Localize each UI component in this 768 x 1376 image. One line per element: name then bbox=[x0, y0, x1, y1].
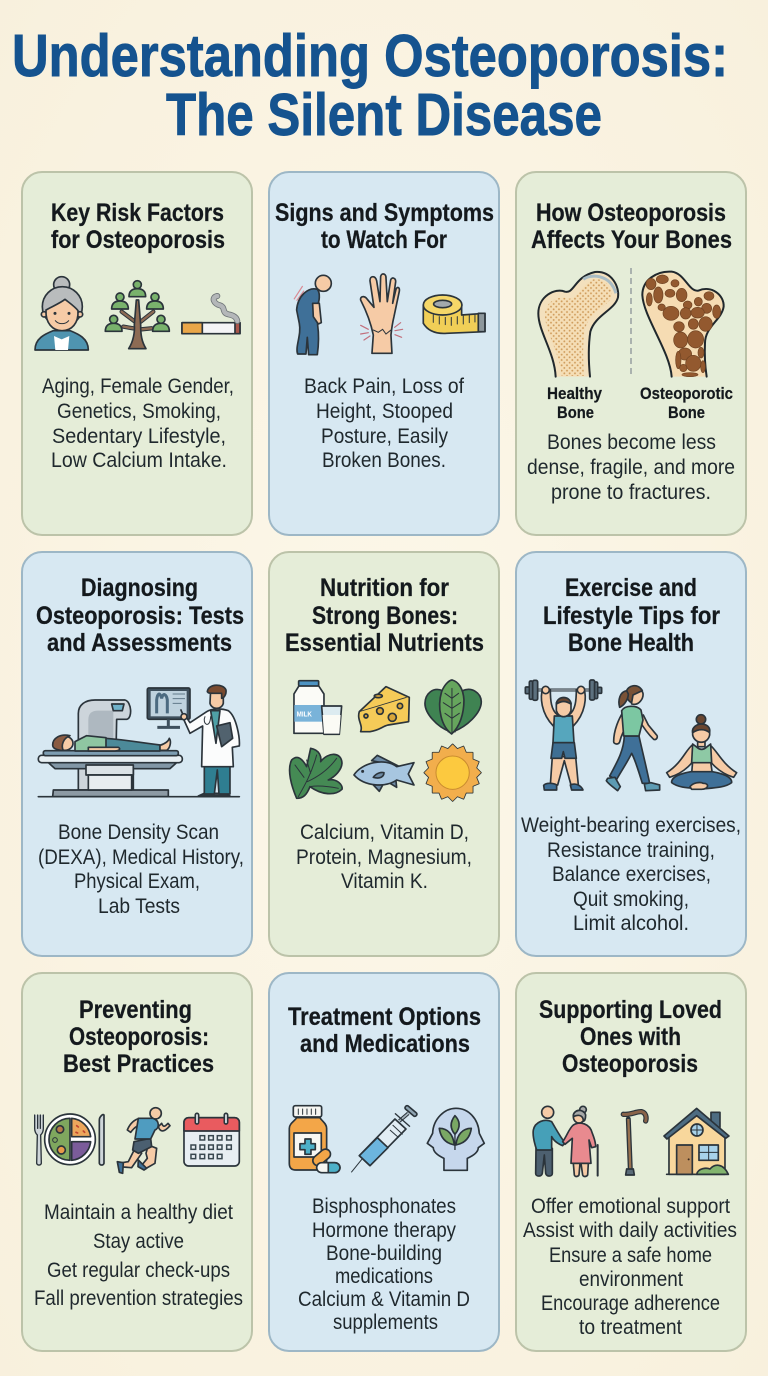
heading: diagnosing bbox=[36, 574, 244, 657]
icon: meditating woman bbox=[667, 715, 737, 789]
icon: weightlifter bbox=[525, 680, 602, 790]
heading: preventing: Osteoporosis: bbox=[69, 1023, 209, 1051]
icon: plate and cutlery bbox=[35, 1114, 104, 1165]
heading: signs and symptoms: to Watch For bbox=[321, 226, 447, 254]
heading: diagnosing: Diagnosing bbox=[81, 574, 198, 602]
icon: pill bottle bbox=[289, 1106, 340, 1173]
icon: elderly woman bbox=[35, 277, 88, 350]
panel: signs and symptoms bbox=[269, 172, 499, 535]
label: osteoporotic bone bbox=[640, 384, 733, 422]
text: bone effects bbox=[527, 431, 735, 504]
divider: bone comparison bbox=[630, 268, 632, 376]
icon: cigarette bbox=[182, 296, 240, 334]
heading: diagnosing: and Assessments bbox=[47, 629, 232, 657]
text: treatments: supplements bbox=[333, 1311, 438, 1334]
icon: runner bbox=[117, 1108, 170, 1173]
text: symptoms: Posture, Easily bbox=[321, 425, 448, 448]
icon: couple bbox=[533, 1106, 598, 1176]
heading: exercise: Exercise and bbox=[565, 574, 697, 602]
panel: treatment options bbox=[269, 973, 499, 1351]
panel: key risk factors bbox=[22, 172, 252, 535]
icon: osteoporotic bone bbox=[642, 272, 724, 377]
heading: treatment: Treatment Options bbox=[288, 1003, 481, 1031]
text: exercise tips bbox=[521, 814, 741, 935]
heading: supporting: Osteoporosis bbox=[562, 1050, 698, 1078]
text: risk factors: Aging, Female Gender, bbox=[42, 375, 234, 398]
text: nutrients: Calcium, Vitamin D, bbox=[300, 821, 469, 844]
text: risk factors: Low Calcium Intake. bbox=[51, 449, 227, 472]
icon: milk and glass bbox=[294, 681, 342, 734]
text: support tips: environment bbox=[579, 1268, 683, 1291]
heading: nutrition: Strong Bones: bbox=[312, 602, 458, 630]
panel: how osteoporosis affects bones bbox=[516, 172, 746, 535]
icon: syringe bbox=[351, 1105, 418, 1172]
text: nutrients bbox=[296, 821, 472, 893]
text: treatments bbox=[298, 1195, 470, 1334]
icon: healthy bone bbox=[538, 272, 618, 377]
icon: DEXA scanner with patient bbox=[38, 685, 239, 797]
heading: supporting: Ones with bbox=[580, 1023, 681, 1051]
heading: exercise: Bone Health bbox=[568, 629, 694, 657]
icon: spinach bbox=[290, 748, 342, 798]
text: support tips bbox=[523, 1195, 737, 1339]
text: support tips: Assist with daily activities bbox=[523, 1219, 737, 1242]
text: diagnosis methods: (DEXA), Medical History, bbox=[38, 846, 244, 869]
text: symptoms: Height, Stooped bbox=[316, 400, 453, 423]
heading: key risk factors: Key Risk Factors bbox=[51, 199, 224, 227]
label: healthy bone bbox=[547, 384, 602, 422]
icon: walking cane bbox=[623, 1112, 646, 1175]
icon: milk and glass: MILK bbox=[297, 710, 313, 719]
text: prevention: Get regular check-ups bbox=[47, 1259, 230, 1282]
heading: nutrition: Nutrition for bbox=[320, 574, 449, 602]
heading: how osteoporosis affects bones: How Osteoporosis bbox=[536, 199, 726, 227]
icon: stooped person bbox=[294, 275, 331, 355]
text: exercise tips: Balance exercises, bbox=[552, 863, 711, 886]
title bbox=[12, 23, 728, 148]
text: exercise tips: Weight-bearing exercises, bbox=[521, 814, 741, 837]
icon: family tree bbox=[105, 281, 169, 349]
text: exercise tips: Limit alcohol. bbox=[573, 912, 689, 935]
icon: calendar bbox=[184, 1113, 239, 1166]
heading: treatment: and Medications bbox=[300, 1030, 470, 1058]
heading: signs and symptoms: Signs and Symptoms bbox=[275, 199, 494, 227]
text: exercise tips: Resistance training, bbox=[547, 839, 715, 862]
text: risk factors: Sedentary Lifestyle, bbox=[52, 425, 226, 448]
text: support tips: Encourage adherence bbox=[541, 1292, 720, 1315]
label: osteoporotic bone: Bone bbox=[668, 403, 705, 422]
text: treatments: Bone-building bbox=[326, 1242, 442, 1265]
text: risk factors: Genetics, Smoking, bbox=[57, 400, 221, 423]
heading: preventing bbox=[63, 996, 214, 1078]
text: symptoms: Broken Bones. bbox=[322, 449, 446, 472]
heading: key risk factors bbox=[51, 199, 225, 254]
text: nutrients: Protein, Magnesium, bbox=[296, 846, 472, 869]
heading: preventing: Best Practices bbox=[63, 1050, 214, 1078]
heading: diagnosing: Osteoporosis: Tests bbox=[36, 602, 244, 630]
text: diagnosis methods: Bone Density Scan bbox=[58, 821, 219, 844]
title: The Silent Disease bbox=[166, 82, 602, 148]
panel: diagnosing osteoporosis bbox=[22, 552, 252, 956]
text: support tips: to treatment bbox=[579, 1316, 682, 1339]
icon: walking woman bbox=[606, 686, 660, 791]
text: bone effects: Bones become less bbox=[547, 431, 716, 454]
label: osteoporotic bone: Osteoporotic bbox=[640, 384, 733, 403]
text: treatments: Calcium & Vitamin D bbox=[298, 1288, 470, 1311]
text: diagnosis methods bbox=[38, 821, 244, 918]
heading: nutrition bbox=[285, 574, 484, 657]
heading: nutrition: Essential Nutrients bbox=[285, 629, 484, 657]
heading: exercise bbox=[543, 574, 720, 657]
icon: sun bbox=[424, 744, 481, 801]
text: bone effects: prone to fractures. bbox=[551, 481, 711, 504]
label: healthy bone: Bone bbox=[557, 403, 594, 422]
heading: preventing: Preventing bbox=[79, 996, 192, 1024]
heading: how osteoporosis affects bones bbox=[531, 199, 732, 254]
text: diagnosis methods: Lab Tests bbox=[98, 895, 180, 918]
heading: supporting bbox=[539, 996, 722, 1078]
panel: exercise and lifestyle bbox=[516, 552, 746, 956]
text: prevention bbox=[34, 1201, 243, 1310]
panel: supporting loved ones bbox=[516, 973, 746, 1351]
heading: treatment bbox=[288, 1003, 481, 1058]
icon: measuring tape bbox=[423, 295, 485, 333]
text: treatments: Hormone therapy bbox=[312, 1219, 456, 1242]
text: treatments: Bisphosphonates bbox=[312, 1195, 456, 1218]
text: risk factors bbox=[42, 375, 234, 472]
text: diagnosis methods: Physical Exam, bbox=[74, 870, 200, 893]
text: exercise tips: Quit smoking, bbox=[573, 888, 689, 911]
text: prevention: Fall prevention strategies bbox=[34, 1287, 243, 1310]
label: healthy bone: Healthy bbox=[547, 384, 602, 403]
heading: exercise: Lifestyle Tips for bbox=[543, 602, 720, 630]
icon: kale leaves bbox=[425, 680, 481, 734]
icon: injured wrist bbox=[361, 274, 403, 353]
heading: signs and symptoms bbox=[275, 199, 494, 254]
text: bone effects: dense, fragile, and more bbox=[527, 456, 735, 479]
text: symptoms bbox=[304, 375, 464, 472]
panel: preventing osteoporosis bbox=[22, 973, 252, 1351]
icon: head with plant bbox=[427, 1108, 484, 1170]
icon: safe home bbox=[664, 1108, 729, 1174]
text: symptoms: Back Pain, Loss of bbox=[304, 375, 464, 398]
heading: key risk factors: for Osteoporosis bbox=[51, 226, 225, 254]
text: prevention: Stay active bbox=[93, 1230, 184, 1253]
icon: fish bbox=[354, 755, 414, 791]
text: support tips: Ensure a safe home bbox=[549, 1244, 712, 1267]
heading: how osteoporosis affects bones: Affects Your Bones bbox=[531, 226, 732, 254]
panel: nutrition bbox=[269, 552, 499, 956]
heading: supporting: Supporting Loved bbox=[539, 996, 722, 1024]
text: prevention: Maintain a healthy diet bbox=[44, 1201, 233, 1224]
text: nutrients: Vitamin K. bbox=[341, 870, 428, 893]
text: treatments: medications bbox=[335, 1265, 433, 1288]
text: support tips: Offer emotional support bbox=[531, 1195, 730, 1218]
icon: cheese bbox=[359, 687, 409, 732]
